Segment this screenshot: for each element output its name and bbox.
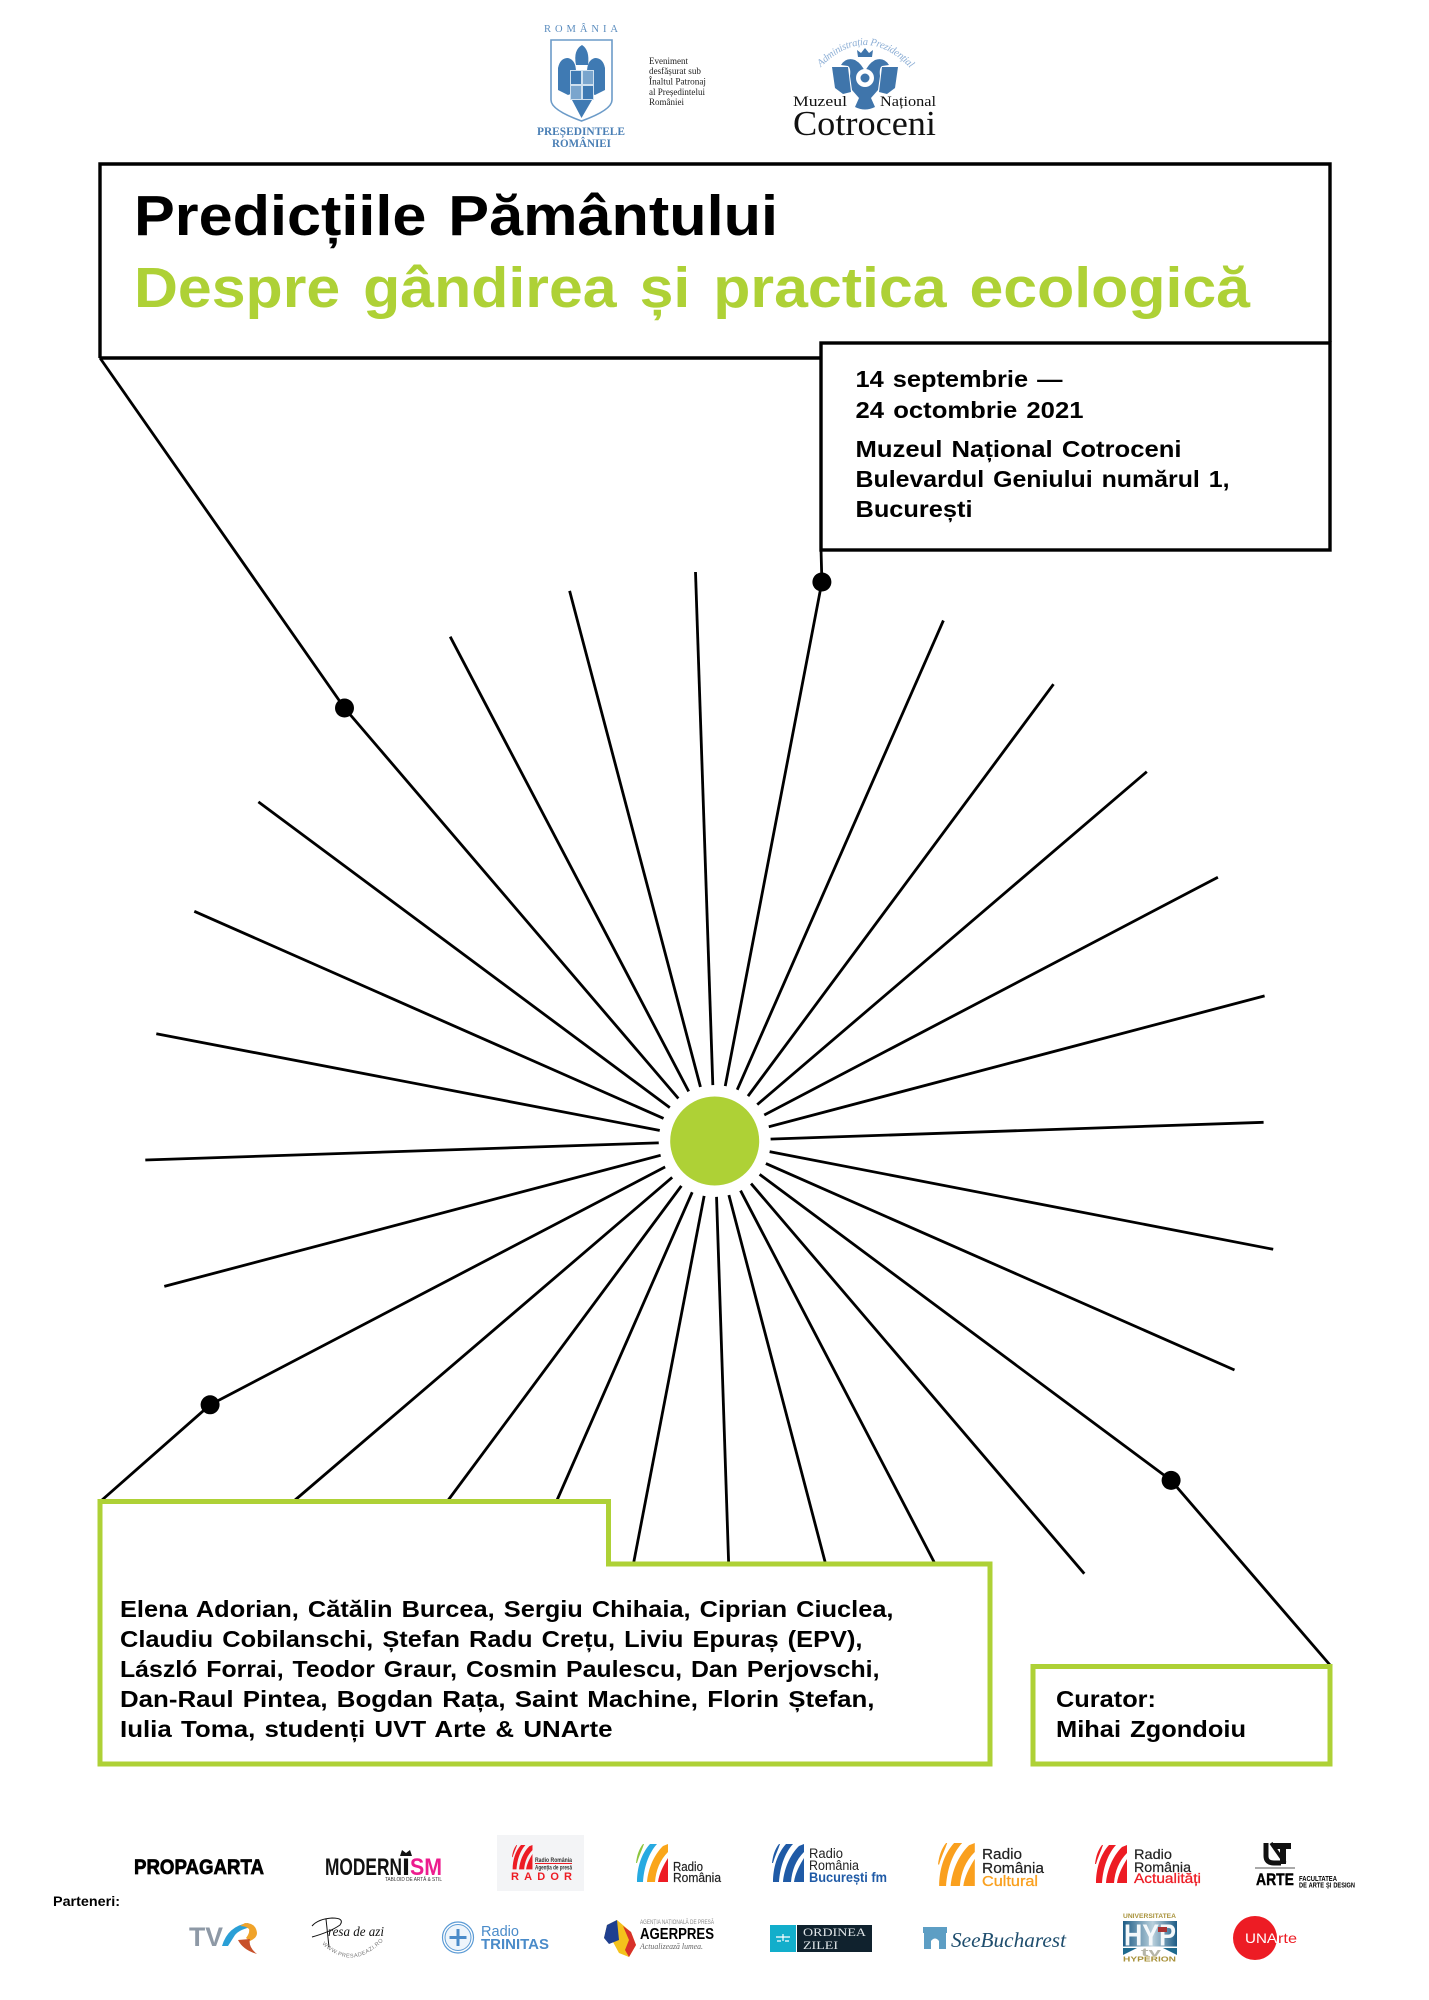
- logo: Rador: RADOR: [511, 1871, 572, 1883]
- logo: Radio România București fm: [772, 1844, 887, 1885]
- logo: See Bucharest: SeeBucharest: [951, 1928, 1067, 1952]
- logo: Ordinea Zilei: ORDINEA: [803, 1925, 866, 1939]
- sunburst rays: [100, 358, 1330, 1665]
- logo: Radio România București fm: Radio: [809, 1846, 843, 1861]
- logo: Radio România Actualități: [1095, 1845, 1201, 1886]
- panel: curator: [1033, 1666, 1330, 1764]
- logo: Radio România Cultural: Radio: [982, 1846, 1022, 1863]
- logo: Muzeul Național Cotroceni: Cotroceni: [793, 104, 936, 143]
- logo: TVR: TV: [189, 1922, 223, 1952]
- logo: Hyperion: [1123, 1913, 1177, 1964]
- heading: main title: Predicțiile Pământului: [134, 184, 778, 249]
- panel: date and location: 24 octombrie 2021: [856, 397, 1084, 423]
- logo: UVT Arte: FACULTATEA: [1299, 1876, 1337, 1883]
- logo: Muzeul Național Cotroceni: Muzeul: [793, 94, 847, 110]
- logo: Hyperion: tv: [1141, 1947, 1163, 1959]
- panel: artists: Iulia Toma, studenți UVT Arte & UNArte: [120, 1716, 612, 1743]
- logo: Modernism: MODERN: [325, 1854, 402, 1881]
- logo: Hyperion: UNIVERSITATEA: [1123, 1913, 1176, 1920]
- logo: UVT Arte: DE ARTE ȘI DESIGN: [1299, 1882, 1355, 1890]
- logo: Radio România: Radio: [673, 1859, 703, 1874]
- logo: Agerpres: AGERPRES: [640, 1926, 714, 1943]
- panel: date and location: Muzeul Național Cotroceni: [856, 436, 1182, 463]
- label: partners: Parteneri:: [53, 1894, 120, 1909]
- logo: Rador: [497, 1835, 584, 1891]
- logo: UNArte: rte: [1278, 1930, 1297, 1946]
- logo: Președintele României: ROMÂNIEI: [552, 136, 611, 150]
- text: patronage note: Eveniment: [649, 56, 688, 66]
- logo: Președintele României: PREȘEDINTELE: [537, 126, 625, 139]
- logo: Propagarta: PROPAGARTA: [134, 1856, 264, 1879]
- logo: Radio Trinitas: [442, 1922, 549, 1953]
- logo: Radio Trinitas: Radio: [481, 1923, 519, 1940]
- panel: date and location: [821, 343, 1330, 550]
- panel: date and location: 14 septembrie —: [856, 366, 1062, 392]
- logo: Muzeul Național Cotroceni: Național: [880, 94, 936, 110]
- logo: Hyperion: HYPERION: [1123, 1956, 1176, 1964]
- ray dots: [201, 572, 1181, 1490]
- heading: subtitle: Despre gândirea și practica ecologică: [134, 256, 1251, 321]
- logo: Radio România București fm: București fm: [809, 1870, 887, 1885]
- logo: UNArte: [1233, 1916, 1297, 1960]
- panel: curator: Mihai Zgondoiu: [1056, 1716, 1246, 1742]
- logo: Președintele României: ROMÂNIA: [544, 23, 618, 35]
- panel: curator: Curator:: [1056, 1686, 1156, 1712]
- text: patronage note: României: [649, 97, 684, 107]
- logo: Rador: Radio România: [535, 1858, 573, 1864]
- logo: Radio Trinitas: TRINITAS: [481, 1936, 549, 1953]
- logo: Ordinea Zilei: [770, 1925, 872, 1952]
- logo: Agerpres: Actualizează lumea.: [639, 1942, 703, 1951]
- logo: Radio România București fm: România: [809, 1858, 859, 1873]
- logo: Radio România Cultural: Cultural: [982, 1873, 1038, 1890]
- panel: artists: [100, 1502, 990, 1764]
- panel: title: [100, 164, 1330, 358]
- text: patronage note: [649, 56, 706, 107]
- logo: Ordinea Zilei: ZILEI: [803, 1938, 838, 1952]
- logo: Modernism: I: [402, 1854, 410, 1881]
- logo: UVT Arte: [1255, 1843, 1355, 1890]
- logo: Radio România: [636, 1844, 722, 1885]
- logo: Presa de azi: [312, 1918, 384, 1958]
- logo: Agerpres: [604, 1919, 714, 1957]
- icon: double-headed eagle: [832, 48, 898, 110]
- icon: coat of arms shield: [551, 40, 612, 121]
- panel: artists: Dan-Raul Pintea, Bogdan Rața, Saint Machine, Florin Ștefan,: [120, 1686, 875, 1713]
- panel: date and location: București: [856, 496, 972, 523]
- logo: Rador: Agenția de presă: [535, 1866, 572, 1872]
- logo: Modernism: TABLOID DE ARTĂ & STIL: [385, 1876, 442, 1883]
- logo: Hyperion: HYP: [1124, 1918, 1176, 1952]
- sun: green circle: [659, 1085, 771, 1197]
- panel: artists: Claudiu Cobilanschi, Ștefan Radu Crețu, Liviu Epuraș (EPV),: [120, 1626, 862, 1653]
- logo: UNArte: UNA: [1245, 1930, 1278, 1946]
- logo: Presa de azi: WWW.PRESADEAZI.RO: [322, 1938, 382, 1958]
- logo: UVT Arte: ARTE: [1256, 1870, 1294, 1889]
- logo: Radio România: România: [673, 1870, 722, 1885]
- logo: Radio România Cultural: [938, 1843, 1045, 1890]
- logo: Radio România Actualități: Radio: [1134, 1846, 1172, 1862]
- text: patronage note: Înaltul Patronaj: [649, 76, 706, 86]
- panel: date and location: Bulevardul Geniului numărul 1,: [856, 466, 1230, 492]
- logo: TVR: [189, 1922, 257, 1954]
- text: patronage note: desfășurat sub: [649, 66, 701, 76]
- panel: artists: László Forrai, Teodor Graur, Cosmin Paulescu, Dan Perjovschi,: [120, 1656, 880, 1682]
- logo: Radio România Actualități: România: [1134, 1859, 1191, 1875]
- logo: Muzeul Național Cotroceni: [793, 38, 936, 143]
- logo: Președintele României: [537, 23, 625, 150]
- logo: Presa de azi: resa de azi: [328, 1925, 384, 1940]
- panel: artists: Elena Adorian, Cătălin Burcea, Sergiu Chihaia, Ciprian Ciuclea,: [120, 1596, 894, 1622]
- logo: Modernism: SM: [410, 1854, 442, 1881]
- logo: Agerpres: AGENȚIA NAȚIONALĂ DE PRESĂ: [640, 1919, 714, 1926]
- text: patronage note: al Președintelui: [649, 87, 705, 97]
- logo: Radio România Actualități: Actualități: [1134, 1870, 1201, 1886]
- logo: Radio România Cultural: România: [982, 1860, 1045, 1877]
